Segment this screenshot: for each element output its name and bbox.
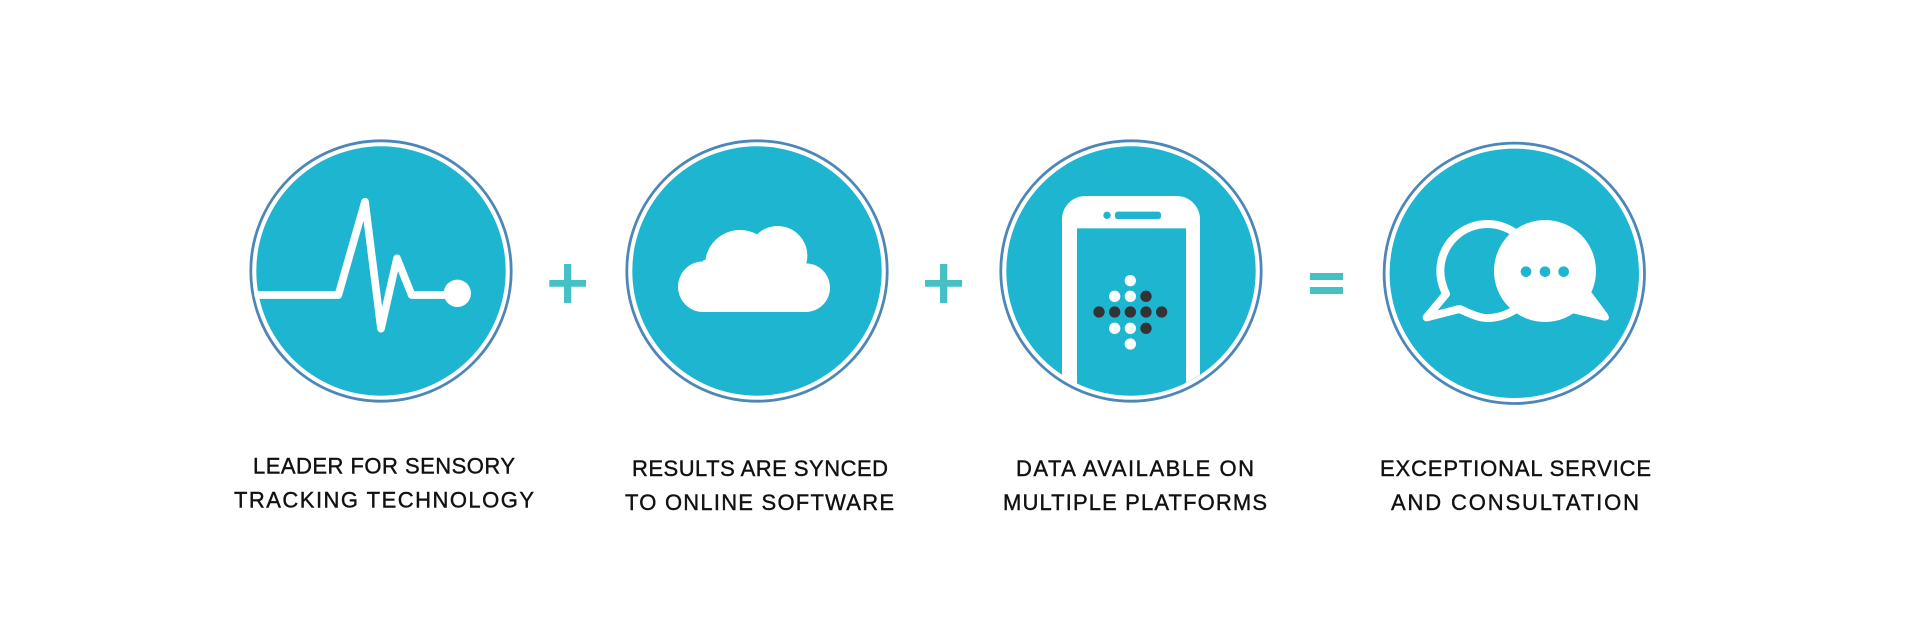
icon: circle badge with speech bubbles [1384, 143, 1645, 404]
label: exceptional service and consultation: EXCEPTIONAL SERVICE [1380, 456, 1651, 481]
panel: exceptional service [1380, 143, 1651, 515]
panel: sensory tracking [234, 141, 534, 513]
plus sign 1 [549, 264, 586, 303]
label: results are synced to online software: TO ONLINE SOFTWARE [625, 490, 894, 515]
icon: circle badge with cloud [627, 141, 887, 401]
plus sign 2 [925, 264, 962, 303]
icon: circle badge with pulse line [251, 141, 511, 401]
icon: circle badge with phone [1001, 141, 1261, 428]
label: exceptional service and consultation: AND CONSULTATION [1391, 490, 1639, 515]
label: leader for sensory tracking technology: TRACKING TECHNOLOGY [234, 488, 534, 512]
infographic: sensor + cloud + platforms = service [234, 139, 1650, 510]
label: exceptional service and consultation [1380, 456, 1651, 515]
label: data available on multiple platforms [1003, 456, 1267, 515]
label: results are synced to online software: RESULTS ARE SYNCED [632, 456, 888, 481]
label: results are synced to online software [625, 456, 894, 515]
panel: multiple platforms [1001, 141, 1267, 515]
panel: synced online [625, 141, 894, 515]
equals sign [1310, 273, 1343, 294]
label: data available on multiple platforms: MULTIPLE PLATFORMS [1003, 490, 1267, 515]
label: data available on multiple platforms: DATA AVAILABLE ON [1016, 456, 1254, 481]
label: leader for sensory tracking technology [234, 454, 534, 512]
label: leader for sensory tracking technology: LEADER FOR SENSORY [253, 454, 515, 478]
